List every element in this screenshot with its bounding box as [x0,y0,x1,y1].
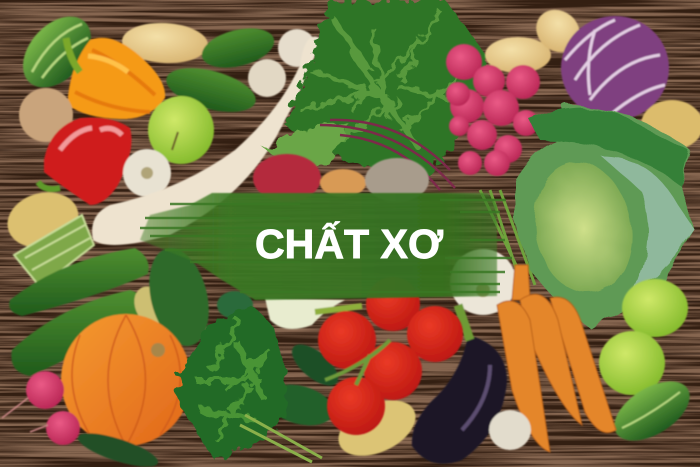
cucumber mid [162,60,260,120]
zucchini 2 [11,290,144,376]
garlic [123,149,171,197]
banner title: CHẤT XƠ [255,221,443,267]
purple cabbage [561,16,669,120]
potato top [121,21,209,65]
vegetables: upper left [1,3,316,467]
green banner [140,193,512,300]
cucumber bottom right [604,369,700,453]
eggplant [412,305,507,464]
zucchini 1 [9,248,149,316]
parsley [175,305,286,460]
pumpkin [61,314,191,446]
radish bunch [446,44,540,176]
zucchini vertical [140,242,218,352]
dark cucumber bottom [75,427,161,467]
carrots [497,265,616,452]
cucumbers under parsley [217,291,345,432]
daikon [92,37,320,245]
green apple top left [148,96,214,164]
tomatoes [318,277,463,435]
left potato [1,185,85,255]
yellow pepper [66,38,165,119]
parsley stems [240,415,322,462]
potato bottom [330,389,424,467]
red beet stems [320,120,455,190]
carrot greens [265,0,490,185]
red pepper [38,117,132,205]
banner streaks [140,200,512,292]
carrot stems [480,190,535,290]
middle items [253,0,535,290]
cucumber short [10,3,104,101]
cucumber top [198,22,278,74]
radishes left [2,371,80,445]
mushroom bottom [489,410,531,450]
garlic right [450,249,516,315]
mushrooms [248,29,316,97]
small fruits behind banner [253,154,429,202]
white bulb [265,298,345,329]
green cabbage [515,104,695,328]
green apples right [599,279,688,395]
onion [19,88,73,142]
celery [14,215,94,287]
potato top right [485,1,700,150]
pale squash [127,280,177,334]
